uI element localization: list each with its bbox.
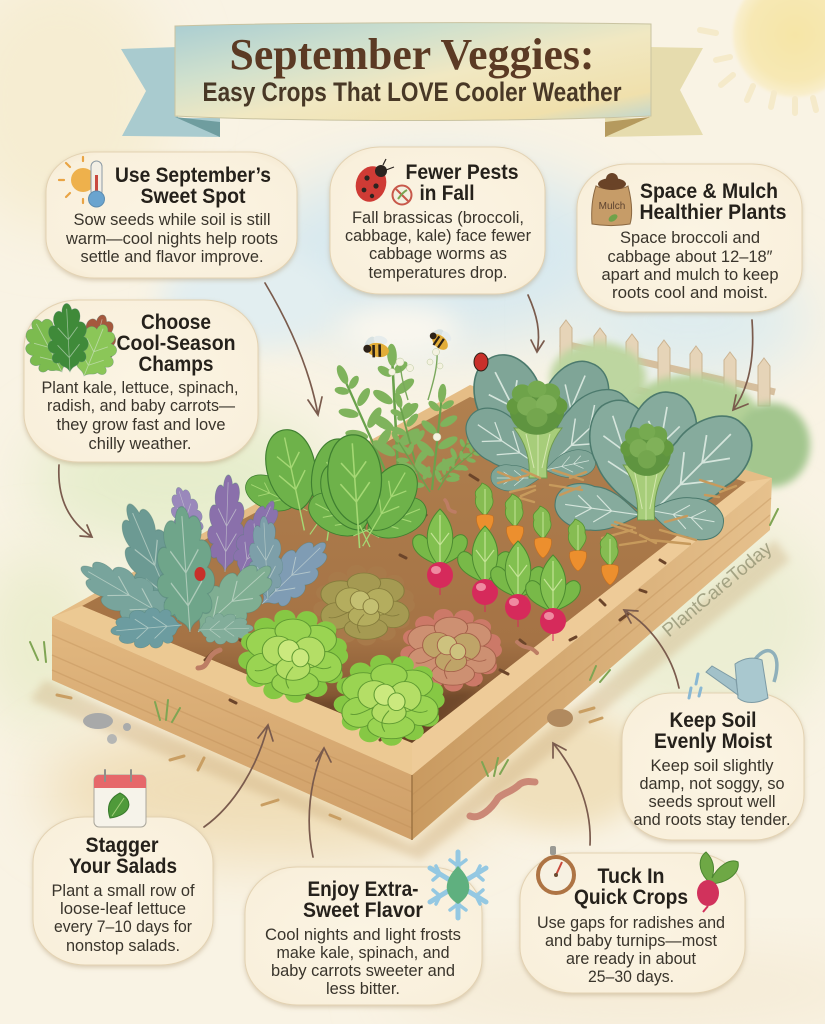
arrows: [59, 283, 753, 857]
panel: enjoy extra-sweet flavor: Sweet Flavor: [303, 899, 423, 922]
panel: use September's sweet spot: [46, 152, 297, 278]
body text: Sow seeds while soil is still: [74, 210, 270, 229]
body text: make kale, spinach, and: [276, 943, 450, 962]
body text: apart and mulch to keep: [602, 265, 778, 284]
olive lettuce: [321, 572, 409, 639]
ground shadow: [30, 540, 790, 860]
body text: temperatures drop.: [368, 263, 508, 282]
body text: cabbage worms as: [369, 244, 507, 263]
arrow: sweet spot: [265, 283, 322, 415]
panel: keep soil evenly moist: Evenly Moist: [654, 730, 772, 753]
body text: radish, and baby carrots—: [47, 396, 235, 415]
body text: loose-leaf lettuce: [60, 899, 186, 918]
panel: choose cool-season champs: Cool-Season: [116, 332, 236, 355]
green lettuce left: [246, 618, 342, 696]
body text: every 7–10 days for: [54, 917, 192, 936]
panel: tuck in quick crops: [520, 846, 745, 993]
body text: [42, 378, 238, 453]
body text: Keep soil slightly: [650, 756, 774, 775]
body text: roots cool and moist.: [612, 283, 768, 302]
body text: nonstop salads.: [66, 936, 180, 955]
heading: Choose: [141, 311, 211, 334]
body text: [345, 208, 531, 282]
herbs: [317, 342, 490, 500]
heading: Space & Mulch: [640, 180, 778, 203]
mulch piles: [498, 470, 736, 545]
broccoli plant back: [455, 344, 644, 491]
spinach plants: [240, 425, 432, 557]
icon: radish: [697, 852, 738, 912]
title banner: [121, 23, 703, 137]
panel: stagger your salads: [33, 770, 213, 965]
body text: [602, 228, 778, 302]
heading: Use September’s: [115, 164, 271, 187]
body text: cabbage about 12–18″: [608, 247, 772, 266]
body text: Use gaps for radishes and: [537, 913, 725, 932]
panel: space and mulch: [577, 164, 802, 312]
soil specks and worms: [125, 475, 665, 740]
panel: enjoy extra-sweet flavor: [245, 852, 486, 1005]
body text: are ready in about: [566, 949, 696, 968]
ground details: stones, worm, grass: [30, 509, 778, 819]
heading: Keep Soil: [670, 709, 756, 732]
body text: Plant a small row of: [52, 881, 195, 900]
icon: calendar: [94, 770, 146, 827]
body text: [634, 756, 790, 829]
panel: keep soil evenly moist: [622, 651, 804, 840]
icon: mulch bag: [592, 173, 632, 226]
body text: cabbage, kale) face fewer: [345, 226, 531, 245]
subtitle: Easy Crops That LOVE Cooler Weather: [202, 77, 622, 107]
front-left wall: [52, 606, 412, 840]
carrots: [475, 483, 618, 585]
arrow: sweet flavor: [309, 748, 331, 857]
icon: stopwatch: [538, 846, 574, 893]
body text: [52, 881, 195, 955]
icon: ladybug: [351, 159, 394, 206]
left ribbon tail: [121, 47, 220, 137]
body text: [537, 913, 725, 986]
icon: bees and ladybug: [360, 325, 488, 371]
panel: space and mulch: Healthier Plants: [640, 201, 786, 224]
arrow: cool-season champs: [59, 465, 92, 537]
potato clod: [547, 709, 573, 727]
icon: snowflake with leaf: [430, 852, 486, 918]
body text: less bitter.: [326, 979, 400, 998]
earthworm: [470, 782, 535, 817]
body text: [65, 210, 278, 266]
body text: chilly weather.: [88, 434, 192, 453]
body text: Plant kale, lettuce, spinach,: [42, 378, 238, 397]
grass tufts: [30, 509, 778, 776]
icon: salad greens: [14, 303, 125, 384]
broccoli plant front: [552, 387, 766, 544]
heading: Tuck In: [598, 865, 664, 888]
bed top rim: [52, 385, 772, 775]
body text: Cool nights and light frosts: [265, 925, 461, 944]
body text: damp, not soggy, so: [640, 774, 784, 793]
arrow: space and mulch: [733, 320, 753, 410]
body text: warm—cool nights help roots: [65, 229, 278, 248]
icon: no pest: [392, 186, 412, 204]
bushes: [550, 342, 810, 487]
fence: [560, 320, 775, 422]
wood chips: [57, 695, 602, 819]
panel: tuck in quick crops: Quick Crops: [574, 886, 688, 909]
raised garden bed: [30, 385, 790, 860]
front-right wall: [412, 478, 772, 840]
soil: [82, 397, 746, 743]
stones: [83, 713, 113, 729]
panel: choose cool-season champs: [14, 300, 258, 462]
body text: [265, 925, 461, 998]
heading: Enjoy Extra-: [308, 878, 418, 901]
lettuce heads: [246, 572, 496, 739]
kale plants: [70, 474, 340, 652]
radishes: [413, 509, 580, 641]
body text: they grow fast and love: [56, 415, 226, 434]
body text: settle and flavor improve.: [80, 247, 264, 266]
heading: Stagger: [86, 834, 158, 857]
body text: baby carrots sweeter and: [271, 961, 455, 980]
body text: Space broccoli and: [620, 228, 760, 247]
icon: sun and thermometer: [59, 157, 104, 207]
icon: mulch bag: Mulch: [599, 201, 625, 212]
icon: watering can: [689, 651, 777, 702]
body text: Fall brassicas (broccoli,: [352, 208, 524, 227]
body text: 25–30 days.: [588, 967, 674, 986]
arrow: stagger salads: [204, 725, 273, 827]
right ribbon tail: [605, 47, 703, 137]
icon: sun: [700, 0, 825, 113]
arrow: quick crops: [553, 743, 590, 845]
watermark: PlantCareToday: [659, 538, 777, 642]
arrow: fewer pests: [528, 295, 544, 352]
red lettuce: [408, 616, 496, 685]
green lettuce right: [342, 663, 438, 739]
heading: Fewer Pests: [406, 161, 518, 184]
body text: and baby turnips—most: [545, 931, 717, 950]
ribbon body: [175, 23, 651, 120]
panel: stagger your salads: Your Salads: [69, 855, 177, 878]
panel: fewer pests in fall: [330, 147, 545, 294]
body text: and roots stay tender.: [634, 810, 790, 829]
body text: seeds sprout well: [648, 792, 776, 811]
panel: choose cool-season champs: Champs: [138, 353, 214, 376]
panel: use September's sweet spot: Sweet Spot: [140, 185, 246, 208]
panel: fewer pests in fall: in Fall: [420, 182, 474, 205]
arrow: keep soil moist: [624, 610, 679, 688]
title text: September Veggies:: [230, 30, 594, 79]
